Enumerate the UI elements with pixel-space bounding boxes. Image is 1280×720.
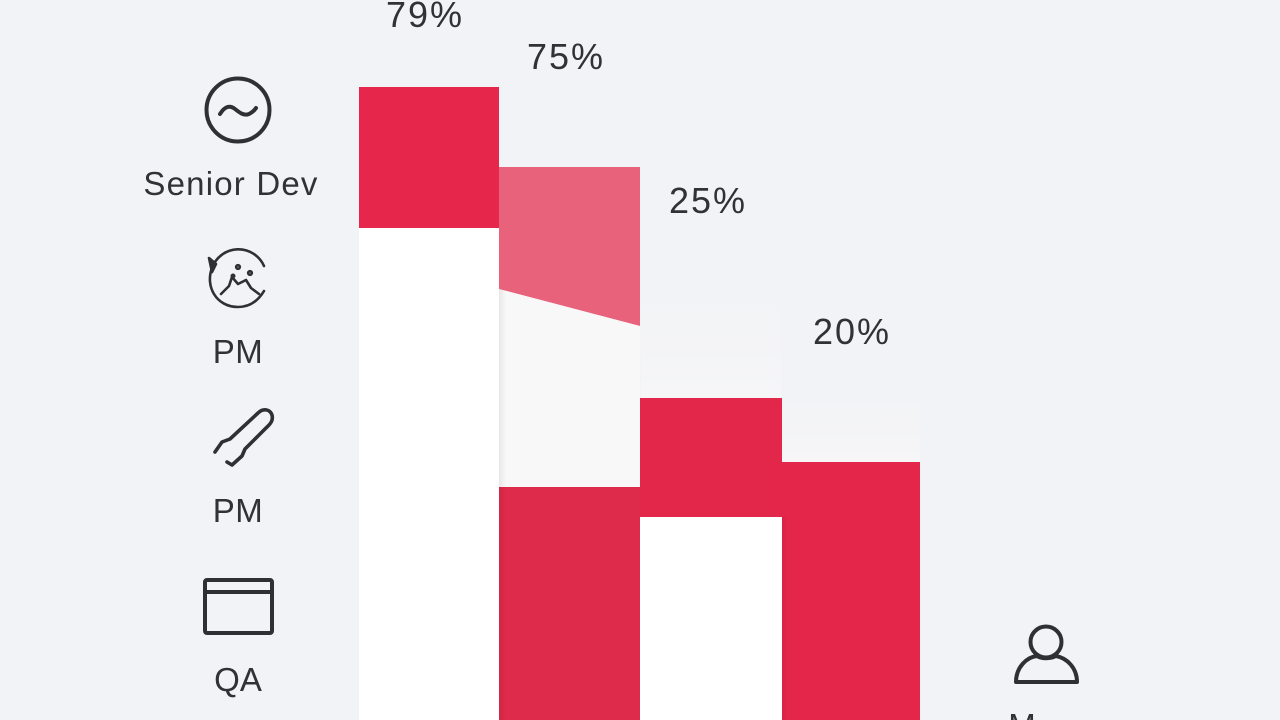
label: PM: PM — [213, 492, 263, 529]
icon: browser window — [205, 580, 272, 633]
bar 4: 20% — [782, 311, 920, 720]
bar 2: 75% — [499, 36, 640, 720]
label: QA: QA — [214, 661, 262, 698]
role: QA — [205, 580, 272, 698]
bar 3: 25% — [640, 180, 782, 720]
bar 2: 75%: 75% — [527, 36, 605, 77]
icon: tongs — [215, 410, 272, 465]
bar chart — [359, 0, 920, 720]
label: PM: PM — [213, 333, 263, 370]
role: Senior Dev — [143, 78, 319, 202]
role: M (cut off) — [1008, 626, 1077, 720]
icon: person — [1016, 626, 1077, 682]
label: Senior Dev: Senior Dev — [143, 165, 319, 202]
icon: circle with wave — [206, 78, 270, 142]
role: PM — [213, 410, 272, 529]
role: PM — [209, 249, 264, 370]
icon: circular arrow with landscape — [209, 249, 264, 307]
bar 3: 25%: 25% — [669, 180, 747, 221]
bar 4: 20%: 20% — [813, 311, 891, 352]
bar 1: 79% — [359, 0, 499, 720]
